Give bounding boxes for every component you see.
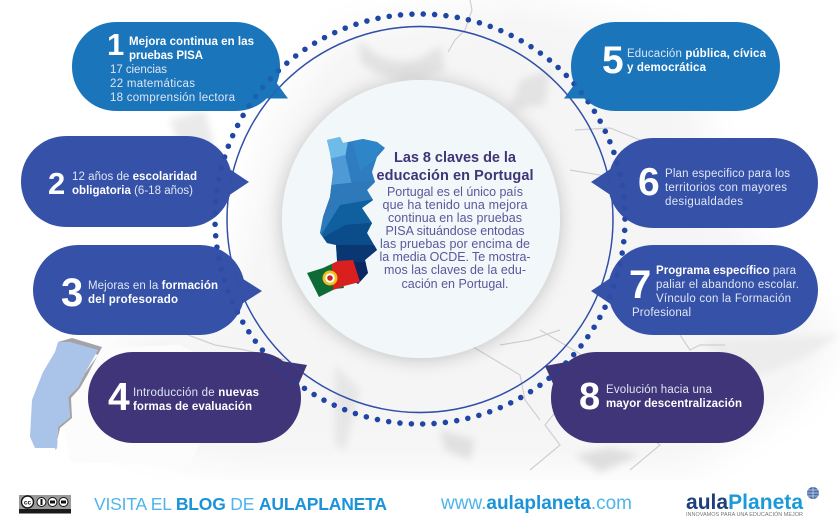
panel: clave 1 — [72, 22, 288, 111]
panel: clave 7: 7 — [629, 263, 651, 307]
panel: clave 4: 4 — [108, 376, 130, 419]
map borders — [188, 0, 725, 470]
footer: website: www.aulaplaneta.com — [440, 493, 632, 514]
text block: intro: las pruebas por encima de — [380, 237, 530, 251]
panel: clave 8: 8 — [579, 376, 600, 418]
text block: intro: que ha tenido una mejora — [382, 198, 528, 212]
panel: clave 8 — [545, 352, 764, 443]
thin ring — [227, 26, 613, 412]
panel: clave 5 — [564, 22, 780, 111]
panel: clave 2: 2 — [48, 166, 65, 201]
panel: clave 7 — [591, 245, 818, 335]
panel: clave 6: Plan especifico para los — [665, 168, 790, 180]
panel: clave 3: del profesorado — [88, 294, 178, 306]
text block: intro: PISA situándose entodas — [386, 224, 524, 238]
panel: clave 3: Mejoras en la formación — [88, 280, 218, 292]
panel: clave 1: Mejora continua en las — [129, 36, 254, 48]
panel: clave 7: Programa específico para — [656, 265, 797, 277]
icon: creative commons badge: cc — [24, 500, 31, 506]
panel: clave 6: territorios con mayores — [665, 182, 787, 194]
heading: educación en Portugal — [376, 168, 534, 184]
icon: Portuguese flag — [307, 260, 360, 297]
panel: clave 3: 3 — [61, 271, 83, 315]
text block: intro: mos las claves de la edu- — [384, 263, 526, 277]
panel: clave 5: Educación pública, cívica — [627, 48, 767, 60]
heading: Las 8 claves de la — [394, 150, 517, 166]
panel: central circle — [282, 80, 560, 358]
icon: creative commons badge — [19, 495, 71, 514]
panel: clave 3 — [33, 245, 262, 335]
panel: clave 6: 6 — [638, 161, 660, 204]
text block: intro: la media OCDE. Te mostra- — [380, 250, 530, 264]
icon: Portugal low-poly map — [307, 130, 390, 297]
logo: aulaPlaneta: aulaPlaneta — [686, 491, 803, 514]
dotted ring seen through bubbles — [215, 14, 625, 424]
panel: clave 1: pruebas PISA — [129, 50, 203, 62]
panel: clave 2: obligatoria (6-18 años) — [72, 185, 193, 197]
panel: clave 8: Evolución hacia una — [606, 384, 713, 396]
panel: clave 5: y democrática — [627, 62, 707, 74]
panel: clave 1: 18 comprensión lectora — [110, 92, 236, 104]
panel: clave 6 — [591, 138, 818, 228]
dotted outer ring — [215, 14, 625, 424]
panel: clave 4 — [88, 352, 307, 443]
heading — [376, 150, 534, 184]
footer: blog link: VISITA EL BLOG DE AULAPLANETA — [94, 494, 387, 514]
map: highlighted Portugal — [30, 338, 102, 450]
panel: clave 4: formas de evaluación — [133, 401, 252, 413]
panel: clave 6: desigualdades — [665, 196, 743, 208]
panel: clave 4: Introducción de nuevas — [133, 387, 259, 399]
panel: clave 7: Vínculo con la Formación — [656, 293, 791, 305]
panel: clave 1: 1 — [107, 27, 124, 62]
panel: clave 2: 12 años de escolaridad — [72, 171, 197, 183]
text block: intro — [380, 185, 530, 291]
panel: clave 7: Profesional — [632, 307, 691, 319]
text block: intro: continua en las pruebas — [388, 211, 522, 225]
panel: clave 7: paliar el abandono escolar. — [656, 279, 799, 291]
panel: clave 5: 5 — [602, 39, 624, 82]
panel: clave 1: 17 ciencias — [110, 64, 167, 76]
panel: clave 8: mayor descentralización — [606, 398, 742, 410]
logo: aulaPlaneta — [686, 487, 819, 518]
text block: intro: cación en Portugal. — [402, 277, 508, 291]
logo: aulaPlaneta: INNOVAMOS PARA UNA EDUCACIÓN MEJOR — [686, 511, 803, 518]
panel: clave 2 — [21, 136, 249, 227]
text block: intro: Portugal es el único país — [387, 185, 523, 199]
panel: clave 1: 22 matemáticas — [110, 78, 195, 90]
